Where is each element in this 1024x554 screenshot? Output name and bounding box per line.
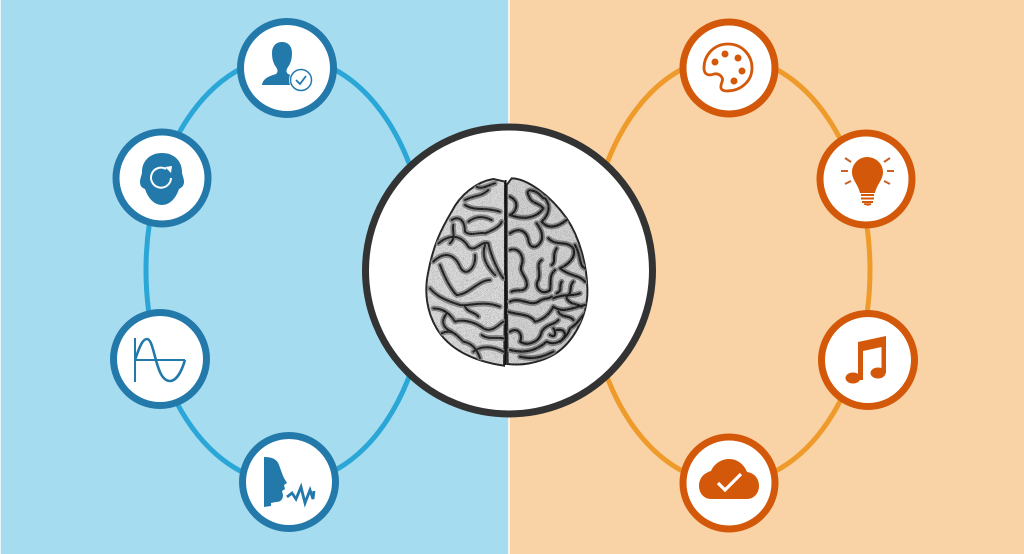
right ring connector [588, 57, 870, 483]
icon: music notes [822, 314, 914, 406]
icon: light bulb [820, 133, 912, 225]
icon: person with check [240, 22, 334, 114]
central brain circle [366, 127, 652, 414]
icon: head with refresh arrow [116, 132, 208, 224]
panel: right orange background [509, 0, 1024, 554]
brain right hemisphere [507, 178, 587, 365]
icon: sine wave graph [114, 312, 206, 406]
icon: artist palette [683, 22, 775, 114]
icon: cloud with check [683, 437, 775, 529]
panel: left blue background [0, 0, 509, 554]
icon: speaking face with sound wave [242, 436, 336, 528]
left ring connector [146, 57, 428, 483]
brain left hemisphere [426, 179, 505, 366]
brain illustration [423, 178, 589, 367]
brain stipple shading [423, 178, 507, 367]
